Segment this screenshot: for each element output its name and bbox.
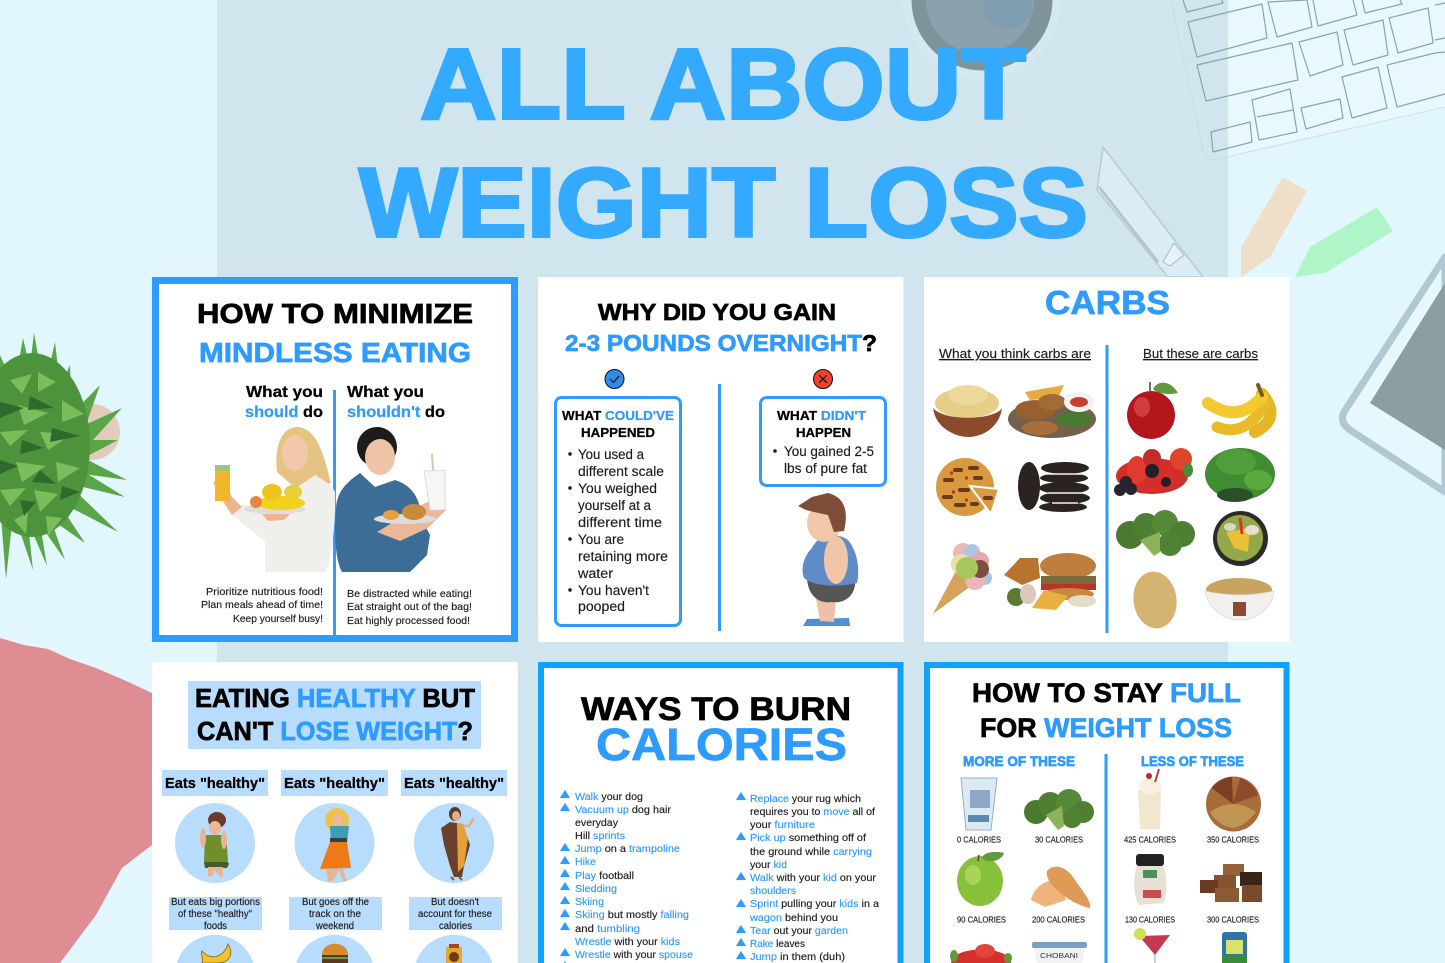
list: left column: Jump on a trampoline bbox=[575, 843, 680, 855]
food: chicken bbox=[1031, 867, 1090, 908]
figure: orange skirt bbox=[320, 808, 351, 881]
heading: WAYS TO BURN bbox=[581, 691, 851, 727]
calorie labels bbox=[957, 836, 1259, 924]
food: yogurt bbox=[1032, 942, 1087, 963]
column headings: What you bbox=[347, 384, 424, 401]
food: cocktail bbox=[1134, 928, 1170, 963]
icon: check bbox=[605, 370, 624, 388]
column headings bbox=[963, 753, 1244, 769]
column 3: But doesn't bbox=[431, 897, 479, 908]
list: left column: Sledding bbox=[575, 883, 617, 895]
panel: how to stay full bbox=[927, 665, 1286, 963]
list: right column: the ground while carrying bbox=[750, 846, 872, 858]
column 2: weekend bbox=[315, 921, 354, 932]
list: right column: Rake leaves bbox=[750, 938, 805, 950]
tips: shouldn't do bbox=[347, 588, 472, 627]
box: what could've happened: You weighed bbox=[578, 481, 657, 496]
food: apple bbox=[1127, 382, 1178, 439]
list: left column bbox=[560, 790, 693, 963]
list: left column: Play football bbox=[575, 870, 634, 882]
food: soda can bbox=[1222, 932, 1247, 963]
column headings: shouldn't do bbox=[347, 404, 445, 421]
column 1: Eats "healthy" bbox=[165, 775, 265, 792]
food: broccoli bbox=[1116, 510, 1195, 556]
list: right column: Walk with your kid on your bbox=[750, 872, 877, 884]
food: wings bbox=[1008, 385, 1096, 438]
tips: should do: Plan meals ahead of time! bbox=[201, 599, 323, 611]
sticky tab: green bbox=[1295, 207, 1393, 277]
column 2: But goes off the bbox=[302, 897, 369, 908]
box: what didn't happen: You gained 2-5 bbox=[784, 444, 874, 459]
list: left column: Hill sprints bbox=[575, 830, 625, 842]
column 1: But eats big portions bbox=[171, 897, 260, 908]
column 2 bbox=[281, 770, 388, 963]
heading bbox=[972, 678, 1241, 743]
list: left column: Wrestle with your kids bbox=[575, 936, 680, 948]
column divider bbox=[1106, 345, 1108, 633]
calorie labels: 90 CALORIES bbox=[957, 916, 1006, 924]
food: mayo jar bbox=[1134, 854, 1166, 905]
box: what could've happened: You haven't bbox=[578, 583, 649, 598]
column headings: What you think carbs are bbox=[939, 346, 1091, 361]
food: pizza bbox=[936, 458, 999, 516]
food: yogurt: CHOBANI bbox=[1040, 951, 1078, 960]
panel: carbs bbox=[924, 277, 1290, 642]
keyboard bbox=[1171, 0, 1445, 160]
list: right column: Pick up something off of bbox=[750, 832, 866, 844]
pen bbox=[1097, 147, 1203, 277]
icon: cross bbox=[814, 370, 832, 388]
food: chocolate bbox=[1200, 864, 1262, 902]
list: right column: requires you to move all of bbox=[750, 806, 875, 818]
food: strawberries bbox=[950, 944, 1012, 963]
food: nuts bbox=[1206, 776, 1261, 832]
person: healthy plate bbox=[213, 427, 335, 572]
box: what didn't happen bbox=[760, 398, 886, 486]
panel: eating healthy bbox=[152, 662, 518, 963]
heading: MINDLESS EATING bbox=[199, 337, 471, 368]
column headings: MORE OF THESE bbox=[963, 753, 1075, 769]
title: ALL ABOUT bbox=[420, 28, 1026, 140]
panel: ways to burn calories bbox=[541, 665, 900, 963]
calorie labels: 200 CALORIES bbox=[1032, 916, 1085, 924]
calorie labels: 350 CALORIES bbox=[1207, 836, 1259, 844]
column 3 bbox=[401, 770, 507, 963]
food: broccoli bbox=[1024, 789, 1094, 830]
box: what could've happened: pooped bbox=[578, 599, 625, 614]
towel bbox=[0, 638, 152, 963]
title: WEIGHT LOSS bbox=[359, 148, 1088, 258]
box: what could've happened: water bbox=[577, 566, 614, 581]
sticky tab: tan bbox=[1241, 177, 1307, 277]
calorie labels: 130 CALORIES bbox=[1125, 916, 1175, 924]
tips: should do: Keep yourself busy! bbox=[233, 613, 323, 625]
heading bbox=[565, 299, 877, 356]
heading: WHY DID YOU GAIN bbox=[598, 299, 836, 325]
box: what could've happened: different scale bbox=[578, 464, 664, 479]
food: berries bbox=[1114, 448, 1193, 496]
heading bbox=[188, 681, 481, 749]
list: right column: your kid bbox=[750, 859, 787, 871]
coffee cup bbox=[902, 0, 1062, 80]
column headings: What you bbox=[246, 384, 323, 401]
panel: gain overnight bbox=[538, 277, 904, 642]
icon: banana bbox=[201, 944, 231, 963]
panel: ways to burn calories: CALORIES bbox=[596, 719, 847, 770]
list: left column: everyday bbox=[575, 817, 619, 829]
column headings bbox=[245, 384, 445, 421]
column 2: track on the bbox=[309, 909, 361, 920]
figure: person on scale bbox=[798, 493, 858, 626]
column divider bbox=[718, 384, 721, 631]
box: what could've happened: You used a bbox=[578, 447, 644, 462]
heading: EATING HEALTHY BUT bbox=[195, 683, 475, 713]
food: bananas bbox=[1208, 385, 1271, 432]
list: right column: Jump in them (duh) bbox=[750, 951, 845, 963]
box: what didn't happen: HAPPEN bbox=[796, 425, 851, 440]
list: left column: Hike bbox=[575, 856, 596, 868]
list: left column: Skiing bbox=[575, 896, 604, 908]
list: right column: shoulders bbox=[750, 885, 796, 897]
tips: shouldn't do: Be distracted while eating! bbox=[347, 588, 472, 600]
list: left column: and tumbling bbox=[575, 923, 640, 935]
column 3: Eats "healthy" bbox=[404, 775, 504, 792]
food: green apple bbox=[957, 852, 1004, 906]
figure: long dress bbox=[441, 807, 474, 880]
column 3: calories bbox=[439, 921, 472, 932]
icon: juice box bbox=[446, 944, 462, 963]
column 1 bbox=[162, 770, 268, 963]
food: potato bbox=[1130, 569, 1180, 631]
panel: mindless eating bbox=[156, 280, 514, 638]
column 3: account for these bbox=[418, 909, 492, 920]
column headings: But these are carbs bbox=[1143, 346, 1259, 361]
box: what could've happened: You are bbox=[578, 532, 624, 547]
plant bbox=[0, 333, 127, 579]
column headings: should do bbox=[245, 404, 323, 421]
food: burger and sides bbox=[1004, 553, 1096, 610]
food: salad bbox=[1213, 511, 1268, 566]
list: left column: Wrestle with your spouse bbox=[575, 949, 693, 961]
heading: HOW TO MINIMIZE bbox=[197, 298, 473, 329]
box: what didn't happen: WHAT DIDN'T bbox=[777, 408, 866, 423]
calorie labels: 0 CALORIES bbox=[957, 836, 1001, 844]
icon: burger bbox=[322, 944, 348, 963]
list: left column: Walk your dog bbox=[575, 791, 643, 803]
tips: should do bbox=[201, 586, 323, 625]
heading: 2-3 POUNDS OVERNIGHT ? bbox=[565, 330, 877, 356]
title bbox=[359, 28, 1088, 258]
heading: CARBS bbox=[1045, 284, 1170, 321]
calorie labels: 300 CALORIES bbox=[1207, 916, 1259, 924]
tips: shouldn't do: Eat straight out of the bag! bbox=[347, 601, 472, 613]
column headings: LESS OF THESE bbox=[1141, 753, 1244, 769]
calorie labels: 425 CALORIES bbox=[1124, 836, 1176, 844]
column headings bbox=[939, 346, 1259, 361]
box: what could've happened: HAPPENED bbox=[581, 425, 655, 440]
food: chips bbox=[933, 385, 1002, 437]
list: left column: Vacuum up dog hair bbox=[575, 804, 672, 816]
food: lettuce bbox=[1205, 448, 1275, 502]
column 2: Eats "healthy" bbox=[284, 775, 385, 792]
box: what could've happened: retaining more bbox=[578, 549, 668, 564]
calorie labels: 30 CALORIES bbox=[1035, 836, 1083, 844]
food: cookies bbox=[1018, 462, 1090, 512]
list: right column bbox=[736, 792, 879, 963]
list: right column: Replace your rug which bbox=[750, 793, 861, 805]
column 1: foods bbox=[204, 921, 227, 932]
column 1: of these "healthy" bbox=[178, 909, 252, 920]
list: right column: your furniture bbox=[750, 819, 815, 831]
column divider bbox=[333, 390, 336, 638]
figure: green dress bbox=[200, 812, 229, 877]
box: what could've happened: yourself at a bbox=[578, 498, 651, 513]
column divider bbox=[1104, 754, 1108, 963]
list: right column: Sprint pulling your kids in a bbox=[750, 898, 879, 910]
heading bbox=[197, 298, 473, 368]
person: unhealthy plate bbox=[335, 427, 446, 572]
food: milkshake bbox=[1138, 769, 1161, 829]
list: right column: wagon behind you bbox=[749, 912, 838, 924]
box: what didn't happen: lbs of pure fat bbox=[784, 461, 867, 476]
box: what could've happened: WHAT COULD'VE bbox=[562, 408, 674, 423]
list: right column: Tear out your garden bbox=[750, 925, 848, 937]
food: water glass bbox=[961, 778, 997, 830]
box: what could've happened bbox=[556, 398, 680, 626]
food: ice cream bbox=[933, 543, 992, 614]
list: left column: Skiing but mostly falling bbox=[575, 909, 689, 921]
heading: FOR WEIGHT LOSS bbox=[980, 713, 1232, 743]
food: oats bowl bbox=[1205, 578, 1274, 620]
tips: shouldn't do: Eat highly processed food! bbox=[347, 615, 470, 627]
tips: should do: Prioritize nutritious food! bbox=[206, 586, 323, 598]
box: what could've happened: different time bbox=[578, 515, 662, 530]
heading: HOW TO STAY FULL bbox=[972, 678, 1241, 708]
phone bbox=[1342, 257, 1445, 492]
heading: CAN'T LOSE WEIGHT? bbox=[197, 716, 473, 746]
